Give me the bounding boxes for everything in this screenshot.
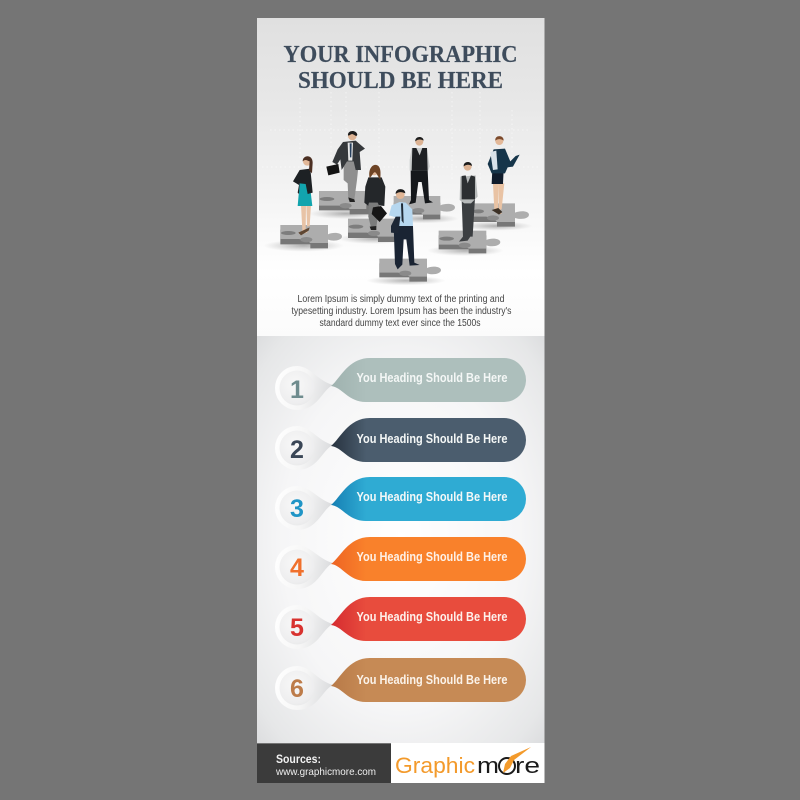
footer: logo: Graphic <box>395 753 475 778</box>
heading pill 2 <box>331 418 526 462</box>
person: woman in black suit <box>364 165 387 230</box>
puzzle piece: back centre <box>389 196 459 223</box>
puzzle piece: right <box>427 231 504 256</box>
heading label 3: You Heading Should Be Here <box>356 490 508 504</box>
puzzle piece: front <box>366 259 446 285</box>
heading pill 6 <box>331 658 526 702</box>
footer: sources <box>257 744 391 783</box>
body text: standard dummy text ever since the 1500s <box>320 318 480 329</box>
heading label 4: You Heading Should Be Here <box>356 550 508 564</box>
title <box>284 41 518 94</box>
illustration: business people on puzzle pieces <box>264 131 533 285</box>
heading label 5: You Heading Should Be Here <box>356 610 508 624</box>
person: man in waistcoat, right <box>459 162 478 242</box>
body text: Lorem Ipsum is simply dummy text of the printing and <box>298 294 504 305</box>
puzzle piece: back left <box>309 191 382 219</box>
marker 5 <box>275 605 333 649</box>
marker 2 <box>275 426 333 470</box>
panel: top hero <box>257 18 544 336</box>
heading label 1: You Heading Should Be Here <box>356 371 508 385</box>
person: woman in navy jacket <box>488 136 520 215</box>
person: man with briefcase on phone <box>326 131 365 202</box>
puzzle piece: back right <box>459 203 533 231</box>
marker 6: 6 <box>290 675 304 703</box>
list item 6 <box>275 658 526 710</box>
marker 4: 4 <box>290 554 304 582</box>
body text: typesetting industry. Lorem Ipsum has been the industry's <box>292 306 512 317</box>
title: SHOULD BE HERE <box>298 67 503 94</box>
footer: logo: m <box>477 753 499 778</box>
marker 3 <box>275 486 333 530</box>
list item 1 <box>275 358 526 410</box>
puzzle piece: far left <box>264 225 344 252</box>
title: YOUR INFOGRAPHIC <box>284 41 518 68</box>
footer: sources: www.graphicmore.com <box>275 766 376 778</box>
list item 2 <box>275 418 526 470</box>
marker 5: 5 <box>290 614 304 642</box>
heading pill 3 <box>331 477 526 521</box>
marker 6 <box>275 666 333 710</box>
puzzle piece: middle <box>338 219 411 244</box>
panel: numbered list <box>257 336 544 743</box>
heading label 6: You Heading Should Be Here <box>356 673 508 687</box>
list item 3 <box>275 477 526 530</box>
heading pill 1 <box>331 358 526 402</box>
marker 1: 1 <box>290 376 304 404</box>
heading pill 4 <box>331 537 526 581</box>
footer: logo: re <box>515 753 540 778</box>
marker 2: 2 <box>290 436 304 464</box>
marker 1 <box>275 366 333 410</box>
heading pill 5 <box>331 597 526 641</box>
heading label 2: You Heading Should Be Here <box>356 432 508 446</box>
list item 4 <box>275 537 526 589</box>
background dotted guide lines <box>262 92 540 180</box>
footer: logo <box>391 743 544 783</box>
footer: sources: Sources: <box>276 752 321 766</box>
person: woman in teal dress <box>293 156 313 235</box>
body text <box>292 294 512 329</box>
person: man in waistcoat <box>409 137 433 204</box>
marker 3: 3 <box>290 495 304 523</box>
person: man in blue shirt, front <box>389 189 420 269</box>
list item 5 <box>275 597 526 649</box>
marker 4 <box>275 545 333 589</box>
